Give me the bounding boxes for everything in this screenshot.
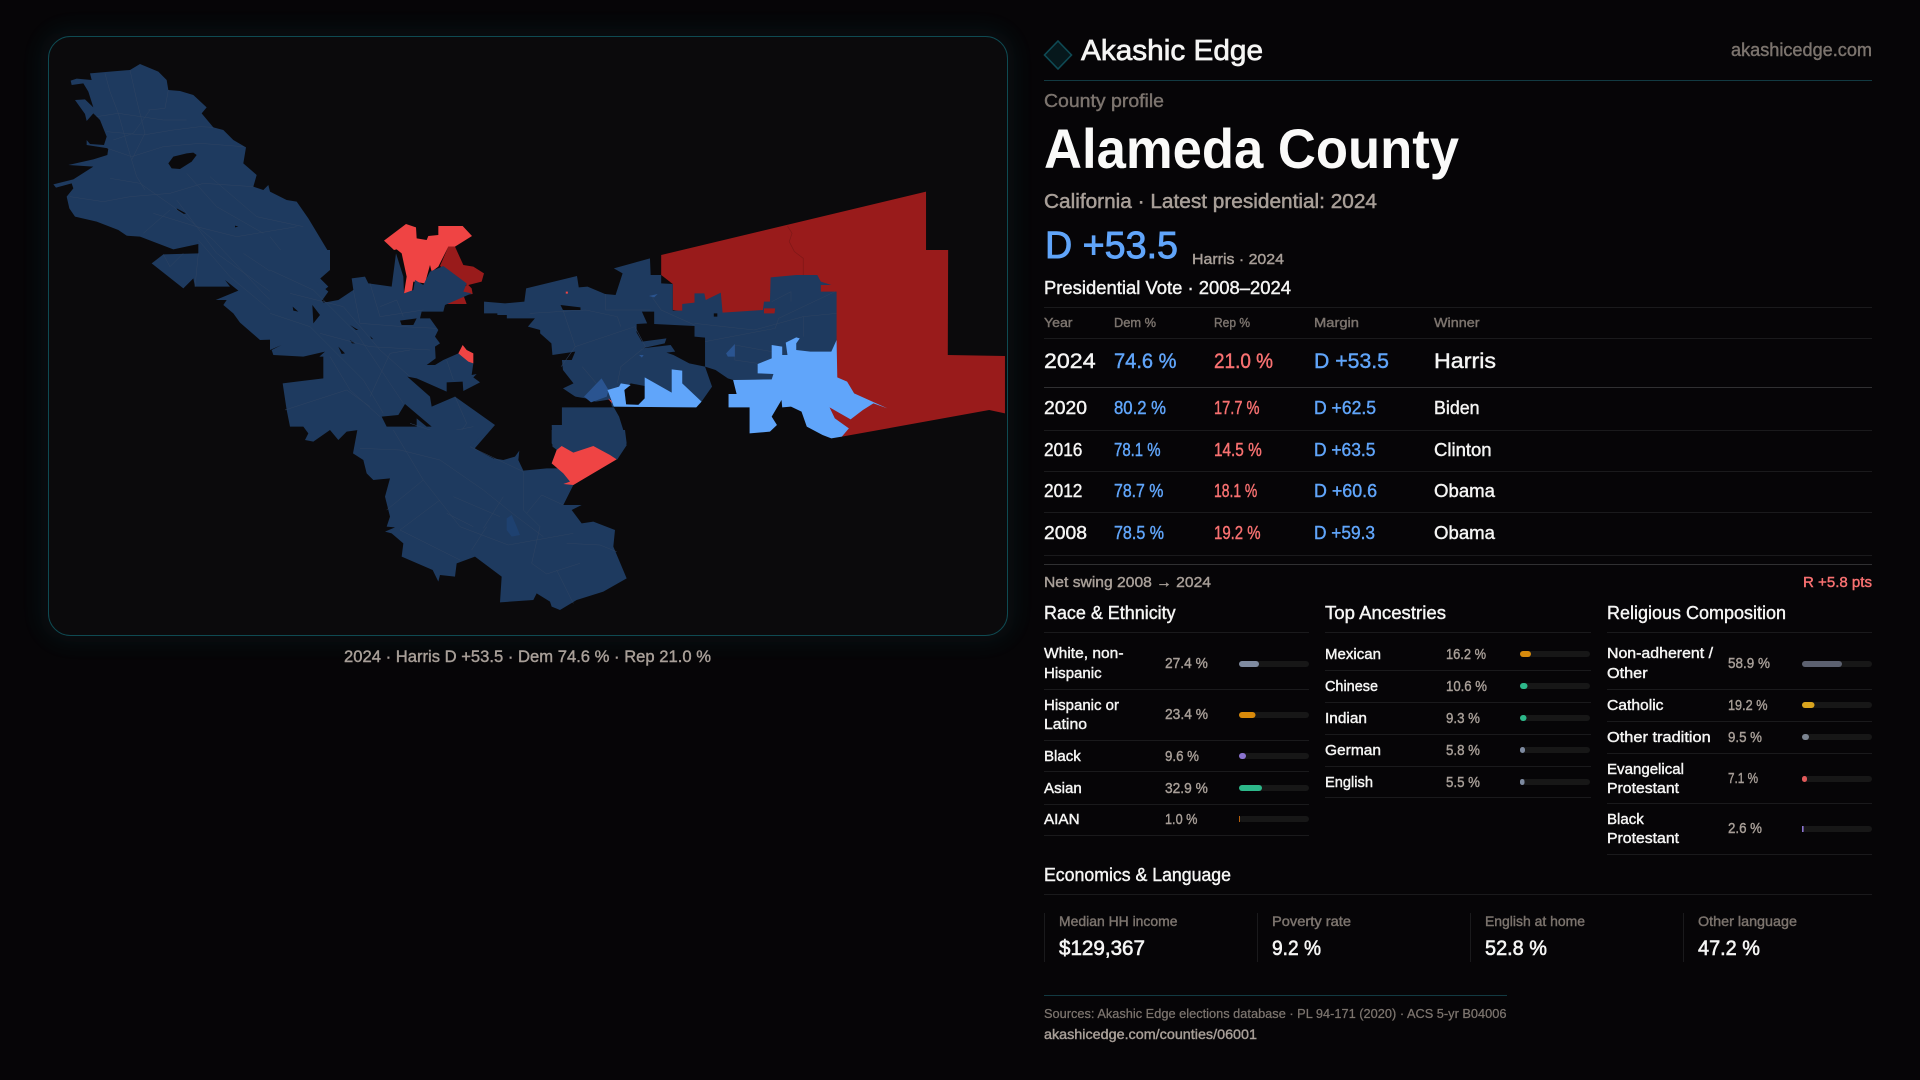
- row: white non-hispanic: Hispanic: [1044, 665, 1102, 682]
- footer: sources: akashicedge.com/counties/06001: [1044, 1026, 1257, 1042]
- row 2020: D +62.5: [1314, 398, 1376, 418]
- icon: diamond logo: [1044, 41, 1072, 69]
- stat: median income: Median HH income: [1059, 913, 1178, 929]
- row 2016: 78.1 %: [1114, 440, 1161, 460]
- stat: poverty rate: Poverty rate: [1272, 913, 1351, 929]
- stat: median income: [1044, 913, 1178, 962]
- row 2012: 2012: [1044, 481, 1082, 501]
- row: indian: Indian: [1325, 710, 1367, 727]
- kicker: county profile: County profile: [1044, 91, 1164, 111]
- row: evangelical protestant: Protestant: [1607, 780, 1680, 797]
- row: asian: Asian: [1044, 780, 1082, 797]
- stat: poverty rate: 9.2 %: [1272, 937, 1321, 960]
- row 2024: 74.6 %: [1114, 350, 1176, 373]
- row 2024: Harris: [1434, 350, 1496, 373]
- table header: Year: [1044, 315, 1073, 330]
- region: eastern blue precincts: [484, 258, 887, 438]
- row: other tradition: 9.5 %: [1728, 729, 1762, 746]
- row: non-adherent: 58.9 %: [1728, 655, 1770, 672]
- row: hispanic or latino: 23.4 %: [1165, 706, 1208, 723]
- row: mexican: 16.2 %: [1446, 646, 1486, 663]
- row 2012: D +60.6: [1314, 481, 1377, 501]
- panel: economics and language: [1044, 865, 1872, 962]
- heading: Top Ancestries: [1325, 603, 1446, 623]
- region: eastern dark red precincts: [661, 192, 1005, 437]
- row: catholic: 19.2 %: [1728, 697, 1768, 714]
- region: blue area above southern red precinct: [552, 407, 627, 463]
- row: white non-hispanic: White, non-: [1044, 645, 1124, 662]
- stat: poverty rate: [1257, 913, 1351, 962]
- title: county name: Alameda County: [1044, 117, 1459, 180]
- row 2024: 2024: [1044, 350, 1096, 373]
- heading: Race & Ethnicity: [1044, 603, 1176, 623]
- row: evangelical protestant: Evangelical: [1607, 761, 1684, 778]
- row: non-adherent: Other: [1607, 665, 1648, 682]
- row: chinese: Chinese: [1325, 678, 1378, 695]
- row: black: [1044, 748, 1309, 765]
- row 2016: 2016: [1044, 440, 1082, 460]
- footer: sources: [1044, 995, 1507, 1042]
- row: hispanic or latino: Hispanic or: [1044, 697, 1119, 714]
- row 2020: Biden: [1434, 398, 1480, 418]
- row: evangelical protestant: [1607, 761, 1872, 797]
- headline margin: [1045, 225, 1284, 268]
- row 2016: Clinton: [1434, 440, 1492, 460]
- row: black protestant: [1607, 811, 1872, 847]
- row 2008: 78.5 %: [1114, 523, 1164, 543]
- caption: map summary: 2024 · Harris D +53.5 · Dem 74.6 % · Rep 21.0 %: [344, 647, 711, 666]
- table header: Rep %: [1214, 315, 1250, 330]
- stat: english at home: English at home: [1485, 913, 1585, 929]
- row: mexican: Mexican: [1325, 646, 1381, 663]
- row: non-adherent: [1607, 645, 1872, 682]
- website: akashicedge.com: [1731, 40, 1872, 60]
- row: asian: [1044, 780, 1309, 797]
- row: german: 5.8 %: [1446, 742, 1480, 759]
- row: aian: [1044, 811, 1309, 828]
- row: aian: AIAN: [1044, 811, 1080, 828]
- brand name: Akashic Edge: [1081, 35, 1263, 67]
- row 2024: 21.0 %: [1214, 350, 1273, 373]
- row: black: 9.6 %: [1165, 748, 1199, 765]
- headline margin: Harris · 2024: [1192, 251, 1284, 268]
- table header: Dem %: [1114, 315, 1156, 330]
- row: white non-hispanic: 27.4 %: [1165, 655, 1208, 672]
- row: chinese: 10.6 %: [1446, 678, 1487, 695]
- heading: presidential vote: Presidential Vote · 2008–2024: [1044, 278, 1291, 298]
- panel: religious composition: [1607, 603, 1872, 855]
- row 2016: 14.5 %: [1214, 440, 1262, 460]
- table header: [1044, 315, 1480, 330]
- region: southern blue precincts: [353, 430, 627, 610]
- row 2020: 17.7 %: [1214, 398, 1260, 418]
- panel: top ancestries: [1325, 603, 1591, 798]
- row: black protestant: Protestant: [1607, 830, 1680, 847]
- row: german: German: [1325, 742, 1381, 759]
- panel: map card: [48, 36, 1008, 636]
- row 2008: 2008: [1044, 523, 1087, 543]
- row 2024: [1044, 350, 1496, 373]
- row: hispanic or latino: Latino: [1044, 716, 1087, 733]
- row: black protestant: Black: [1607, 811, 1644, 828]
- footer: sources: Sources: Akashic Edge elections database · PL 94-171 (2020) · ACS 5-yr B04006: [1044, 1007, 1507, 1021]
- headline margin: D +53.5: [1045, 225, 1178, 267]
- header: brand bar: [1044, 35, 1872, 81]
- heading: Religious Composition: [1607, 603, 1786, 623]
- row 2012: 78.7 %: [1114, 481, 1163, 501]
- row: hispanic or latino: [1044, 697, 1309, 733]
- row 2008: 19.2 %: [1214, 523, 1261, 543]
- row: english: [1325, 774, 1590, 791]
- row: mexican: [1325, 646, 1590, 663]
- row: chinese: [1325, 678, 1590, 695]
- stat: other language: [1683, 913, 1797, 962]
- row 2012: 18.1 %: [1214, 481, 1257, 501]
- stat: english at home: 52.8 %: [1485, 937, 1547, 960]
- row: asian: 32.9 %: [1165, 780, 1208, 797]
- stat: other language: Other language: [1698, 913, 1797, 929]
- row: black: Black: [1044, 748, 1081, 765]
- region: central blue precincts: [270, 250, 495, 450]
- region: northern red precincts: [384, 224, 484, 304]
- row: indian: 9.3 %: [1446, 710, 1480, 727]
- net swing line: Net swing 2008 → 2024: [1044, 574, 1211, 591]
- row 2012: Obama: [1434, 481, 1496, 501]
- row 2008: [1044, 523, 1496, 543]
- row 2008: D +59.3: [1314, 523, 1375, 543]
- row: evangelical protestant: 7.1 %: [1728, 770, 1758, 787]
- row: non-adherent: Non-adherent /: [1607, 645, 1714, 662]
- row: other tradition: Other tradition: [1607, 729, 1711, 746]
- row: white non-hispanic: [1044, 645, 1309, 682]
- row: catholic: Catholic: [1607, 697, 1664, 714]
- subtitle: California · Latest presidential: 2024: [1044, 191, 1377, 213]
- row: aian: 1.0 %: [1165, 811, 1197, 828]
- row: black protestant: 2.6 %: [1728, 820, 1762, 837]
- row: english: 5.5 %: [1446, 774, 1480, 791]
- row: english: English: [1325, 774, 1373, 791]
- stat: english at home: [1470, 913, 1585, 962]
- row 2020: [1044, 398, 1480, 418]
- table header: Margin: [1314, 315, 1359, 330]
- row 2016: [1044, 440, 1492, 460]
- row: german: [1325, 742, 1590, 759]
- row 2020: 80.2 %: [1114, 398, 1166, 418]
- table header: Winner: [1434, 315, 1480, 330]
- row 2020: 2020: [1044, 398, 1087, 418]
- panel: race and ethnicity: [1044, 603, 1309, 836]
- row: catholic: [1607, 697, 1872, 714]
- net swing line: R +5.8 pts: [1803, 574, 1872, 591]
- row 2016: D +63.5: [1314, 440, 1375, 460]
- row: other tradition: [1607, 729, 1872, 746]
- row 2012: [1044, 481, 1496, 501]
- heading: Economics & Language: [1044, 865, 1231, 885]
- table: presidential results: [1044, 307, 1872, 556]
- stat: median income: $129,367: [1059, 937, 1145, 960]
- region: north blue precincts: [53, 64, 363, 340]
- row 2008: Obama: [1434, 523, 1496, 543]
- map: precinct choropleth: [53, 64, 1005, 610]
- stat: other language: 47.2 %: [1698, 937, 1760, 960]
- row: indian: [1325, 710, 1590, 727]
- row 2024: D +53.5: [1314, 350, 1389, 373]
- net swing line: [1044, 564, 1872, 591]
